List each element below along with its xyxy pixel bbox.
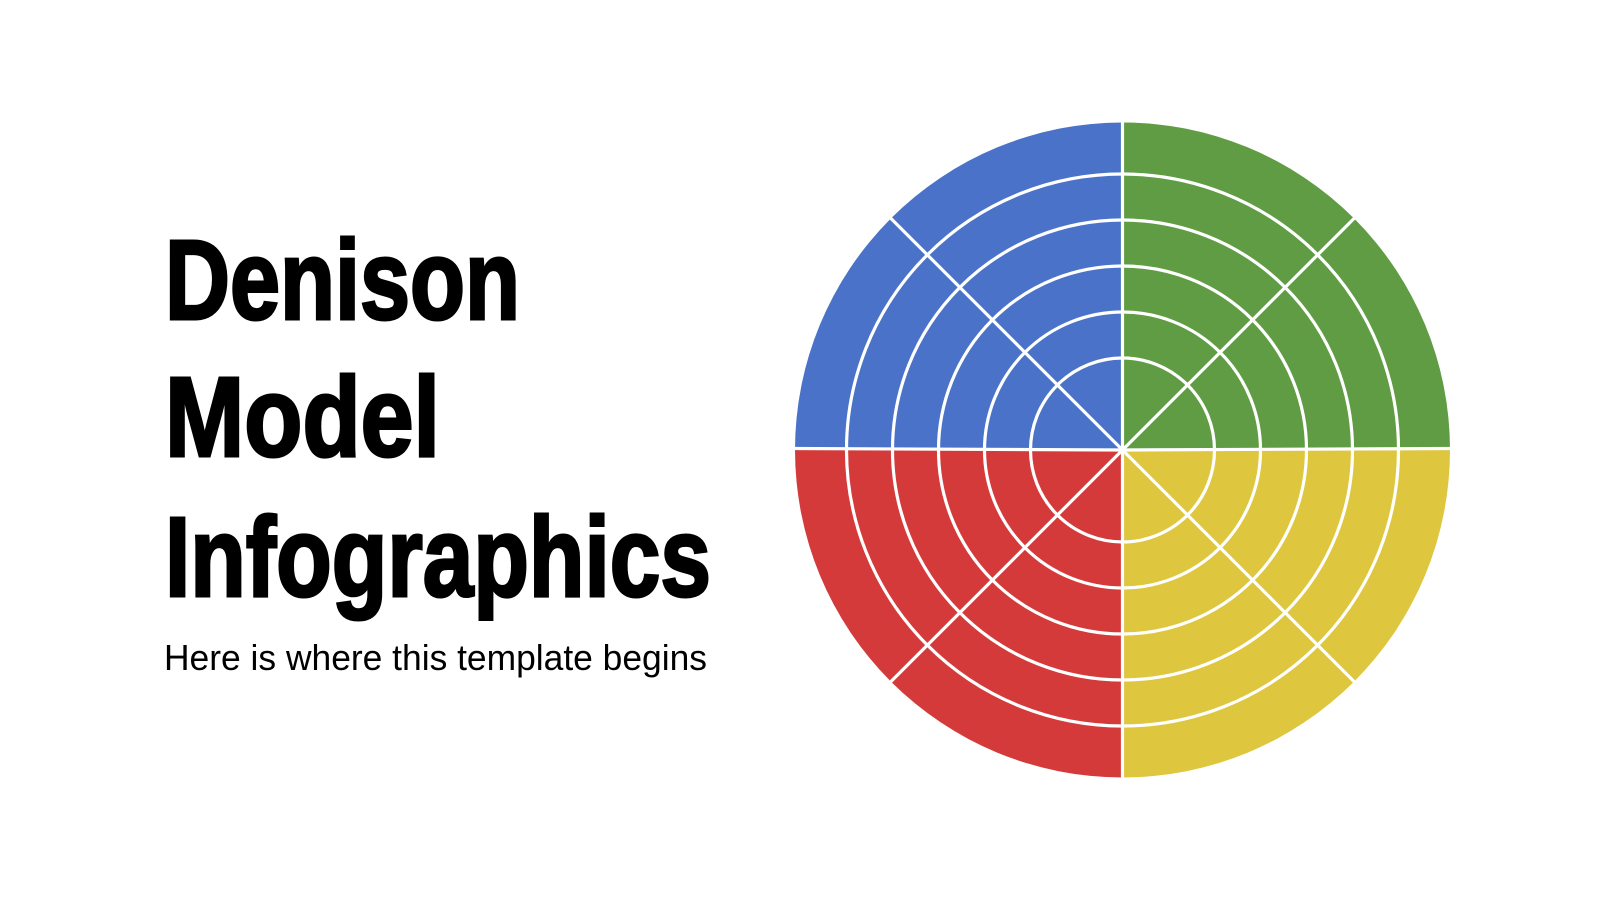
quadrant: blue <box>795 122 1122 450</box>
quadrant: red <box>795 450 1122 778</box>
quadrant: green <box>1122 122 1450 450</box>
quadrant: yellow <box>1122 450 1450 778</box>
title: Model <box>165 354 440 480</box>
concentric rings <box>846 174 1398 726</box>
title: Infographics <box>165 494 711 620</box>
subtitle: Here is where this template begins <box>164 637 707 678</box>
spokes <box>792 120 1453 780</box>
title <box>165 217 711 620</box>
radial chart <box>792 120 1453 780</box>
title: Denison <box>165 217 520 343</box>
